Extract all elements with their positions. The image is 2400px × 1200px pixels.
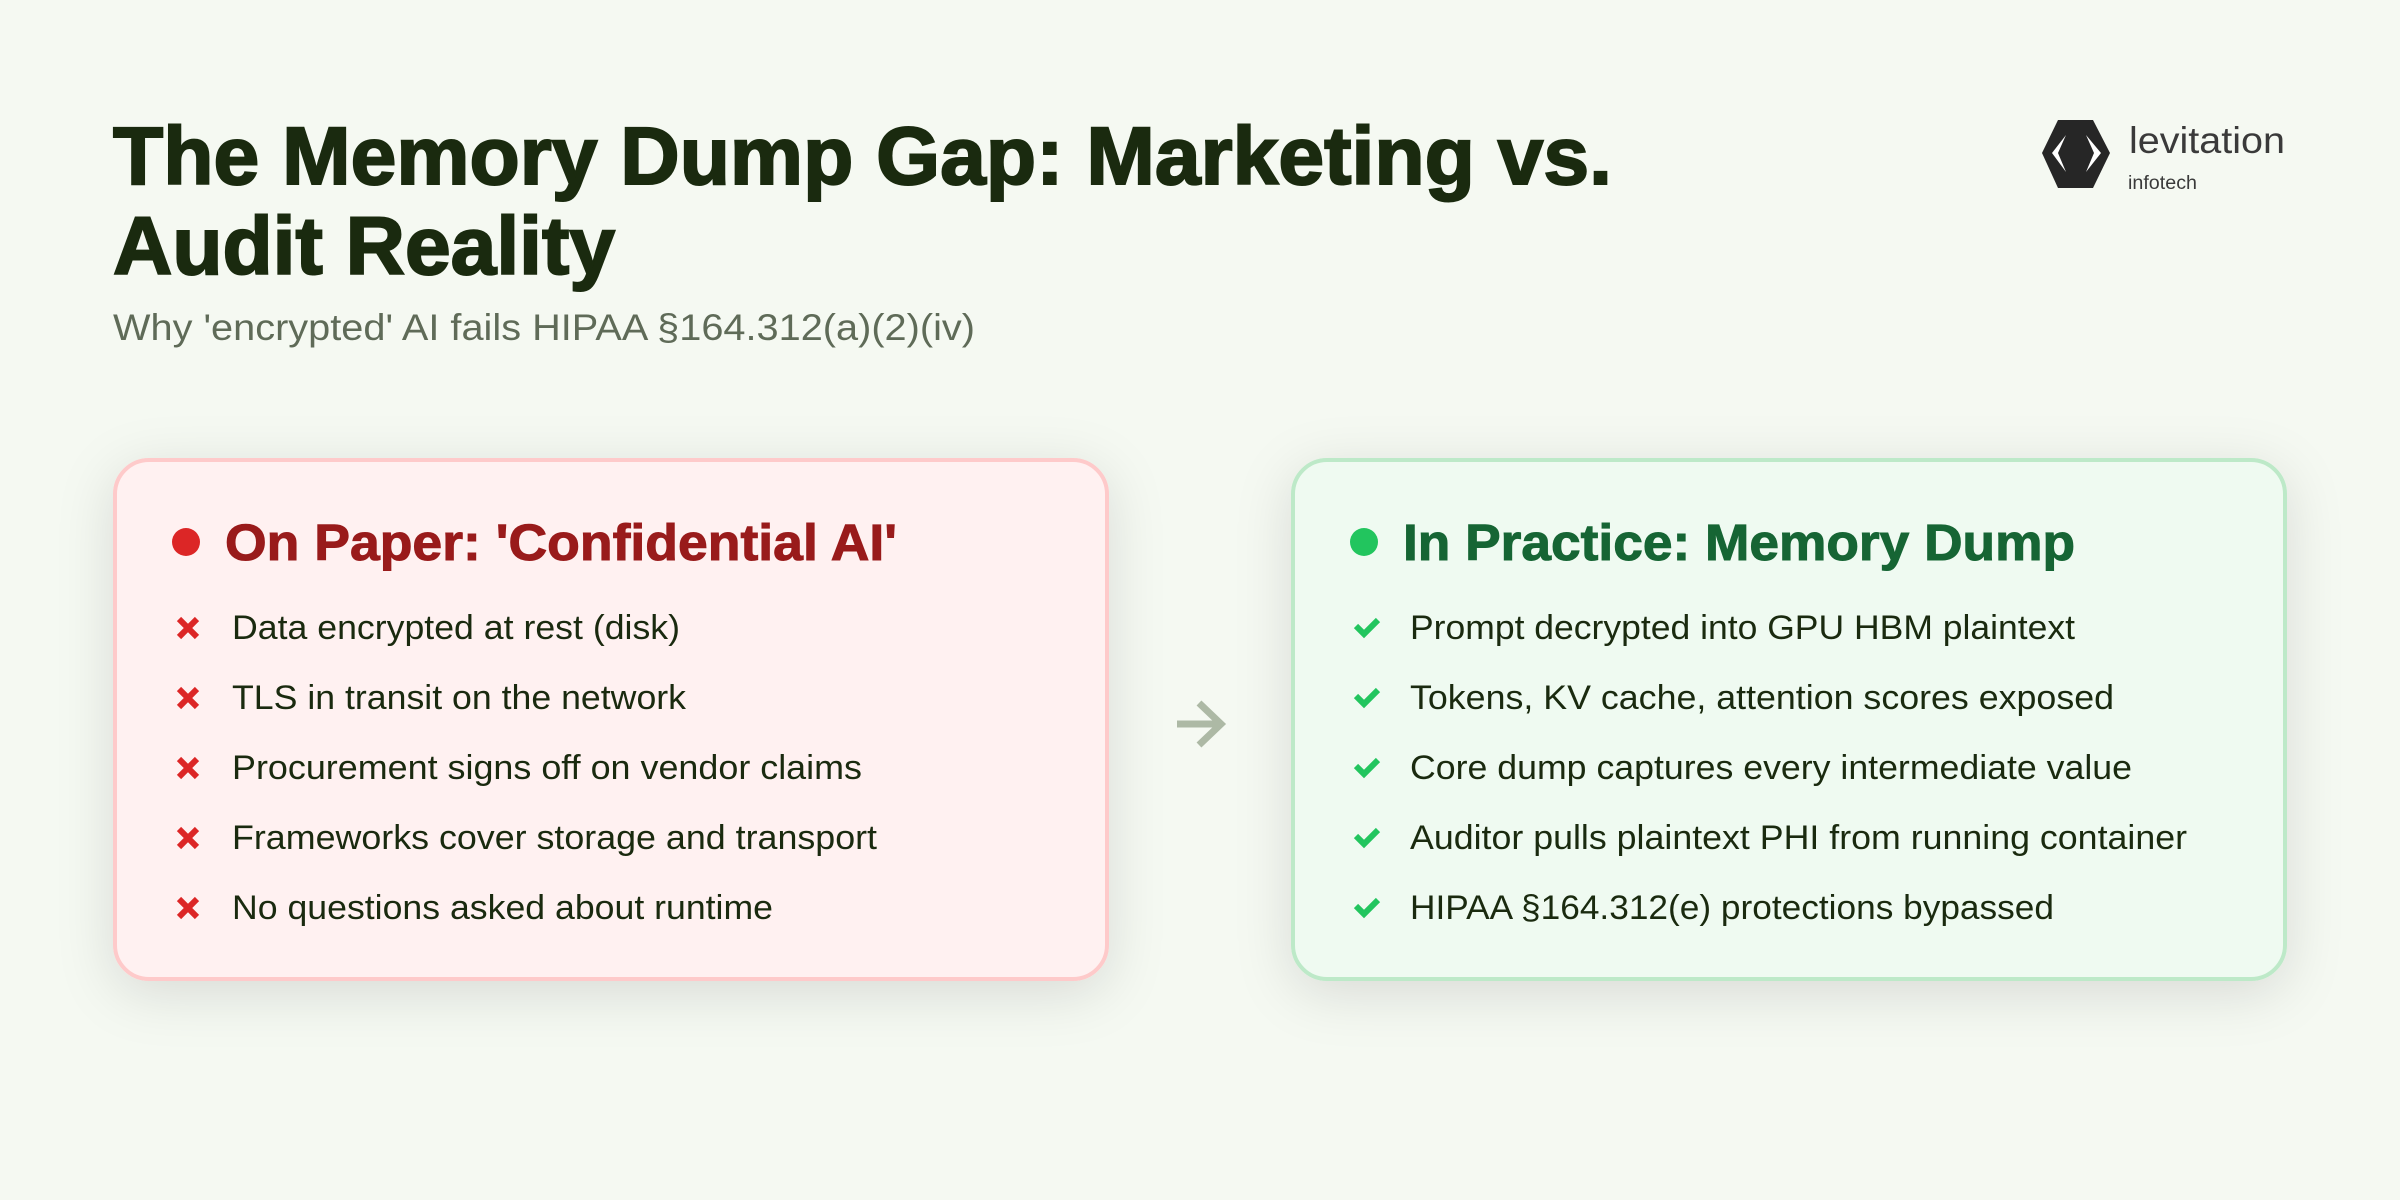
panel heading: On Paper: 'Confidential AI'	[225, 514, 897, 571]
panel heading: In Practice: Memory Dump	[1403, 514, 2075, 571]
icon: hexagon logo mark	[2042, 120, 2110, 188]
list: in practice facts: Auditor pulls plaintext PHI from running container	[1410, 819, 2187, 857]
icon: cross	[179, 759, 197, 777]
icon: cross	[179, 829, 197, 847]
list: on paper claims: Frameworks cover storage and transport	[232, 819, 878, 857]
list: on paper claims: Procurement signs off on vendor claims	[232, 749, 862, 787]
icon: check	[1356, 900, 1378, 914]
list: in practice facts: Prompt decrypted into GPU HBM plaintext	[1410, 609, 2076, 647]
icon: check	[1356, 620, 1378, 634]
panel background	[115, 460, 1107, 979]
icon: cross	[179, 619, 197, 637]
title: The Memory Dump Gap: Marketing vs.	[113, 111, 1612, 202]
list: in practice facts: HIPAA §164.312(e) protections bypassed	[1410, 889, 2054, 927]
list: on paper claims: No questions asked about runtime	[232, 889, 773, 927]
subtitle: Why 'encrypted' AI fails HIPAA §164.312(a)(2)(iv)	[113, 307, 975, 348]
list: in practice facts: Tokens, KV cache, attention scores exposed	[1410, 679, 2114, 717]
icon: check	[1356, 690, 1378, 704]
icon: cross	[179, 899, 197, 917]
icon: check	[1356, 760, 1378, 774]
panel background	[1293, 460, 2285, 979]
list: in practice facts	[1356, 609, 2187, 927]
list: in practice facts: Core dump captures every intermediate value	[1410, 749, 2132, 787]
icon: check	[1356, 830, 1378, 844]
list: on paper claims: TLS in transit on the network	[232, 679, 687, 717]
panel: in practice	[1293, 460, 2285, 979]
list: on paper claims: Data encrypted at rest (disk)	[232, 609, 680, 647]
logo sub-wordmark: infotech	[2128, 173, 2197, 194]
arrow	[1177, 703, 1222, 745]
title: Audit Reality	[113, 201, 615, 292]
panel: on paper	[115, 460, 1107, 979]
logo wordmark: levitation	[2129, 120, 2285, 161]
status dot red	[172, 528, 200, 556]
title	[113, 111, 1612, 292]
list: on paper claims	[179, 609, 878, 927]
status dot green	[1350, 528, 1378, 556]
icon: cross	[179, 689, 197, 707]
logo	[2042, 120, 2285, 194]
